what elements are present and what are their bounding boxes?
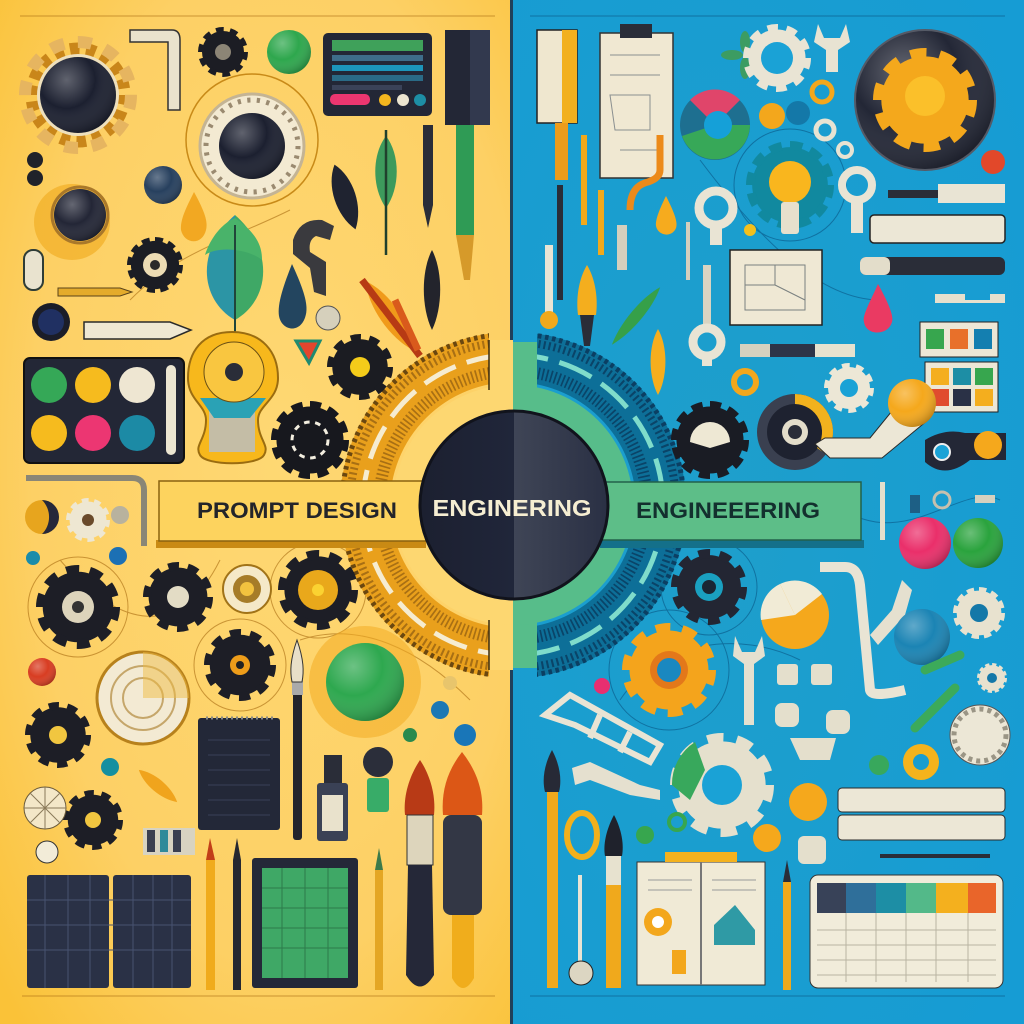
- panel: solar grid panels: [27, 875, 191, 988]
- panel: color bars console: [323, 33, 432, 116]
- panel: paint palette: [24, 358, 184, 463]
- icon: cream ring wrench right: [842, 170, 872, 233]
- icon: yellow clamp: [188, 332, 278, 463]
- icon: gear 1: [41, 570, 115, 644]
- icon: cream pencil: [84, 322, 191, 339]
- icon: big dark circle with orange gear: [855, 30, 995, 170]
- icon: pen bottom: [375, 848, 383, 990]
- icon: concentric dial: [97, 652, 189, 744]
- background: right blue panel: [512, 0, 1024, 1024]
- icon: big green ball: [309, 626, 421, 738]
- central ring: left half: [341, 333, 513, 677]
- icon: large brush left: [405, 760, 434, 986]
- icon: thin pen: [880, 854, 990, 858]
- panel: blueprint sheet: [730, 250, 822, 325]
- icon: orange drop: [181, 192, 207, 241]
- icon: gear bottom left: [67, 794, 119, 846]
- icon: blue ball: [894, 609, 950, 665]
- icon: orange small leaf: [135, 765, 181, 807]
- icon: yellow pen: [58, 288, 132, 296]
- icon: pink ball: [899, 517, 951, 569]
- panel: green grid: [252, 858, 358, 988]
- icon: splat ball: [34, 184, 110, 260]
- icon: small balls and rings: [744, 82, 1005, 236]
- icon: dial knob: [186, 74, 318, 206]
- icon: cream arm with orange ball: [815, 379, 936, 458]
- icon: wrench center: [733, 636, 765, 725]
- icon: cream cylinder: [870, 215, 1005, 243]
- icon: green bottle: [363, 747, 393, 812]
- central ring: right half: [513, 333, 685, 677]
- icon: bent pipe: [26, 478, 144, 546]
- icon: wrench top: [814, 24, 850, 72]
- panel: color swatch cards: [920, 322, 998, 412]
- icon: orange gear large: [628, 629, 710, 711]
- icon: grey ball: [316, 306, 340, 330]
- icon: green ball top: [267, 30, 311, 74]
- icon: orange pipe: [630, 135, 660, 210]
- icon: hook: [293, 220, 334, 296]
- icon: orange feather leaf: [358, 276, 422, 356]
- icon: white sun saw: [950, 705, 1010, 765]
- icon: cream gears right: [956, 590, 1006, 692]
- icon: notebook: [198, 718, 280, 830]
- icon: gear with yellow wheel: [283, 555, 353, 625]
- icon: dark drop: [279, 264, 306, 328]
- icon: small tool: [935, 294, 1005, 303]
- icon: small square parts: [775, 664, 850, 864]
- central disc: [420, 411, 608, 599]
- icon: small dots left: [27, 152, 43, 186]
- icon: red drop: [864, 284, 892, 332]
- icon: ball and rings bottom: [636, 749, 934, 852]
- icon: black leaf: [324, 161, 366, 233]
- icon: bent link tool: [572, 762, 660, 800]
- panel: colored table: [810, 875, 1003, 988]
- icon: yellow ring tool: [567, 813, 597, 857]
- chart: pie dial: [680, 89, 750, 160]
- icon: orange leaf center: [651, 329, 665, 395]
- icon: green ball right: [953, 518, 1003, 568]
- icon: black leaf right: [424, 250, 440, 330]
- panel: clipboard blueprint: [600, 24, 673, 178]
- icon: thin brushes: [206, 838, 241, 990]
- icon: green tool: [915, 655, 960, 728]
- icon: brush left blue side: [544, 750, 560, 988]
- panel: open book: [637, 852, 765, 985]
- banner: engineering: [600, 482, 864, 548]
- icon: bulb with teal gear: [750, 145, 830, 234]
- icon: large cream gear: [672, 739, 768, 831]
- label: prompt design: PROMPT DESIGN: [197, 498, 397, 523]
- palette swatches: [31, 367, 155, 451]
- icon: gear with cream center: [130, 240, 180, 290]
- icon: dark tool with orange ball: [925, 431, 1006, 471]
- icon: orange drop right: [656, 196, 677, 235]
- icon: pen beside book: [783, 860, 791, 990]
- icon: dark pencil: [860, 257, 1005, 275]
- icon: thin ball pen: [569, 875, 593, 985]
- icon: large brush right: [443, 752, 482, 988]
- icon: bottle: [317, 755, 348, 841]
- icon: large teal and green leaf: [205, 215, 263, 335]
- icon: ladder bracket: [545, 695, 660, 762]
- icon: orange dark ball: [25, 500, 59, 534]
- icon: thin pen top right: [888, 184, 1005, 203]
- icon: gear lower left: [29, 706, 87, 764]
- icon: small balls: [26, 506, 129, 565]
- icon: orange ring: [734, 371, 756, 393]
- icon: white splat gear: [69, 501, 107, 539]
- icon: pill: [24, 250, 43, 290]
- icon: tape wheel: [757, 394, 833, 470]
- icon: ring spanner: [693, 265, 721, 366]
- icon: green leaf right: [607, 284, 665, 348]
- background: left yellow panel: [0, 0, 512, 1024]
- icon: cream gear top: [747, 28, 807, 88]
- icon: black gear with fan: [675, 405, 745, 475]
- icon: tall marker: [445, 30, 490, 280]
- icon: thin paint brush: [291, 640, 303, 840]
- icon: green flower: [721, 31, 769, 79]
- label: enginering: ENGINERING: [432, 495, 592, 521]
- icon: small triangle: [296, 341, 320, 363]
- icon: large dotted gear: [275, 405, 345, 475]
- icon: slim pens: [540, 135, 690, 329]
- chart: pie ball: [761, 581, 829, 649]
- icon: gear with orange hole: [208, 633, 272, 697]
- icon: ring dial: [223, 565, 271, 613]
- icon: brush center: [604, 815, 623, 988]
- icon: bent ruler: [130, 30, 180, 110]
- icon: red ball: [28, 658, 56, 686]
- icon: ruler right: [537, 30, 577, 180]
- label: engineeering: ENGINEEERING: [636, 498, 820, 523]
- icon: dark ball: [144, 166, 182, 204]
- icon: cream pipe: [820, 567, 905, 694]
- icon: small gear top: [201, 30, 245, 74]
- banner: prompt design: [156, 481, 427, 548]
- icon: orange brush: [577, 265, 597, 346]
- icon: green leaf: [375, 130, 397, 255]
- icon: dark teal gear: [676, 554, 742, 620]
- icon: cream gear middle: [827, 366, 871, 410]
- icon: sun gear: [25, 42, 131, 148]
- icon: black ring ball: [32, 303, 70, 341]
- icon: cream scrolls: [838, 788, 1005, 840]
- icon: gear 2: [147, 566, 209, 628]
- icon: wrench right: [870, 580, 912, 645]
- icon: long pen: [740, 344, 855, 357]
- icon: pink dot: [594, 678, 610, 694]
- icon: cream ring wrench: [699, 191, 733, 245]
- icon: small colored dots: [36, 676, 476, 863]
- icon: small pen and parts: [880, 482, 995, 540]
- icon: narrow pen: [423, 125, 433, 228]
- icon: gear with yellow center: [331, 338, 389, 396]
- icon: protractor: [24, 787, 66, 829]
- icon: swatch strip: [143, 828, 195, 855]
